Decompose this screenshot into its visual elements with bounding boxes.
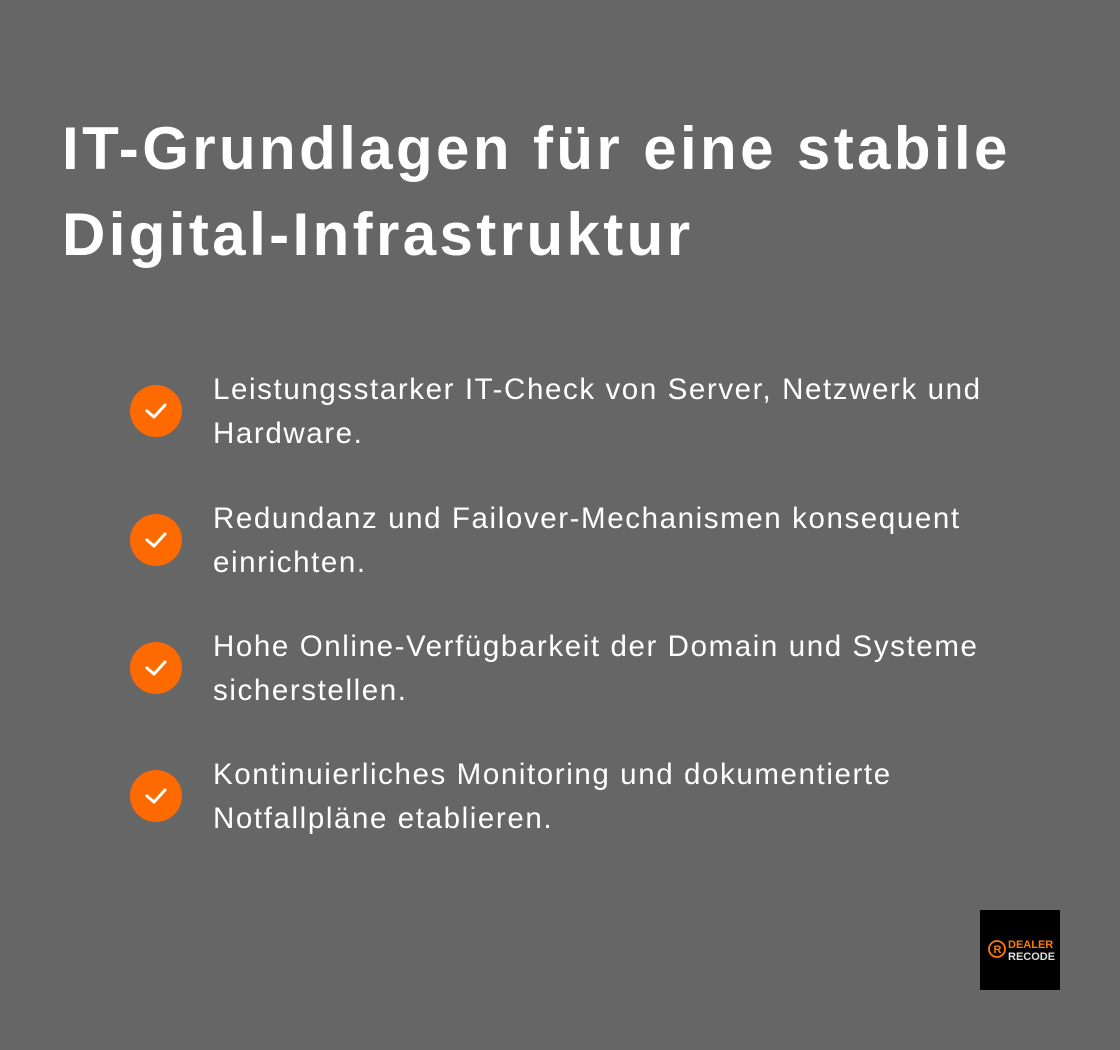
title: IT-Grundlagen für eine stabile	[62, 115, 1011, 182]
text	[213, 502, 961, 579]
text: Notfallpläne etablieren.	[213, 802, 553, 835]
text: Hohe Online-Verfügbarkeit der Domain und Systeme	[213, 630, 978, 663]
title	[62, 115, 1011, 268]
item 1	[130, 373, 982, 450]
item 3	[130, 630, 978, 707]
text: einrichten.	[213, 546, 367, 579]
item 2	[130, 502, 961, 579]
text: Kontinuierliches Monitoring und dokumentierte	[213, 758, 892, 791]
logo: DEALER	[1008, 939, 1053, 951]
logo: RECODE	[1008, 951, 1055, 963]
text: Leistungsstarker IT-Check von Server, Netzwerk und	[213, 373, 982, 406]
icon: check	[130, 770, 182, 822]
logo	[980, 910, 1060, 990]
text: sicherstellen.	[213, 674, 408, 707]
text: Redundanz und Failover-Mechanismen konsequent	[213, 502, 961, 535]
text	[213, 373, 982, 450]
text: Hardware.	[213, 417, 363, 450]
icon: check	[130, 385, 182, 437]
icon: check	[130, 642, 182, 694]
text	[213, 758, 892, 835]
icon: check	[130, 514, 182, 566]
item 4	[130, 758, 892, 835]
title: Digital-Infrastruktur	[62, 201, 693, 268]
text	[213, 630, 978, 707]
logo: R	[994, 944, 1002, 956]
